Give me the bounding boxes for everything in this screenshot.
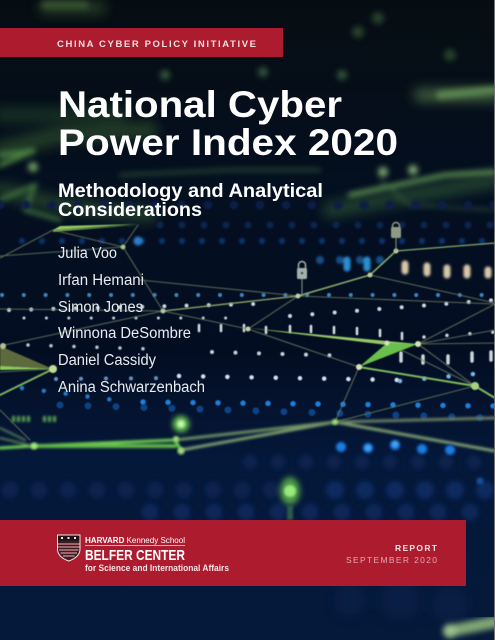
blurred green network, lower bbox=[0, 416, 495, 454]
report label and date bbox=[346, 543, 438, 565]
blurred blue lights, lower bbox=[10, 444, 495, 512]
subtitle: Methodology and Analytical bbox=[58, 180, 323, 202]
dot rows bbox=[2, 295, 495, 418]
authors bbox=[58, 245, 205, 396]
report label and date: SEPTEMBER 2020 bbox=[346, 555, 437, 565]
authors: Irfan Hemani bbox=[58, 272, 144, 289]
blurred blue dots, top band bbox=[0, 205, 495, 275]
subtitle bbox=[58, 180, 323, 221]
icon: padlock, right bbox=[391, 223, 401, 251]
green glow bottom right bbox=[443, 622, 495, 638]
bottom banner bbox=[0, 520, 466, 586]
title: National Cyber bbox=[58, 83, 342, 125]
authors: Winnona DeSombre bbox=[58, 325, 191, 342]
diffuse green haze, top bbox=[0, 8, 495, 215]
logo text: HARVARD Kennedy School bbox=[85, 536, 185, 545]
blurred green network, top bbox=[0, 5, 495, 220]
network lines bbox=[0, 225, 495, 440]
authors: Daniel Cassidy bbox=[58, 352, 156, 369]
logo text: for Science and International Affairs bbox=[85, 563, 229, 573]
logo text: BELFER CENTER bbox=[85, 547, 185, 564]
authors: Anina Schwarzenbach bbox=[58, 379, 205, 396]
top banner bbox=[0, 28, 283, 57]
title: Power Index 2020 bbox=[58, 121, 398, 163]
authors: Julia Voo bbox=[58, 245, 117, 262]
subtitle: Considerations bbox=[58, 199, 202, 221]
icon: padlock, centre bbox=[297, 262, 307, 296]
title bbox=[58, 83, 398, 163]
green polygons bbox=[0, 224, 479, 390]
green glow beacon bbox=[280, 477, 300, 520]
report label and date: REPORT bbox=[395, 543, 438, 553]
authors: Simon Jones bbox=[58, 299, 143, 316]
icon: Harvard shield bbox=[58, 535, 80, 561]
logo text bbox=[85, 536, 229, 573]
lower blurred lights bbox=[334, 580, 468, 623]
top banner: CHINA CYBER POLICY INITIATIVE bbox=[57, 39, 256, 50]
